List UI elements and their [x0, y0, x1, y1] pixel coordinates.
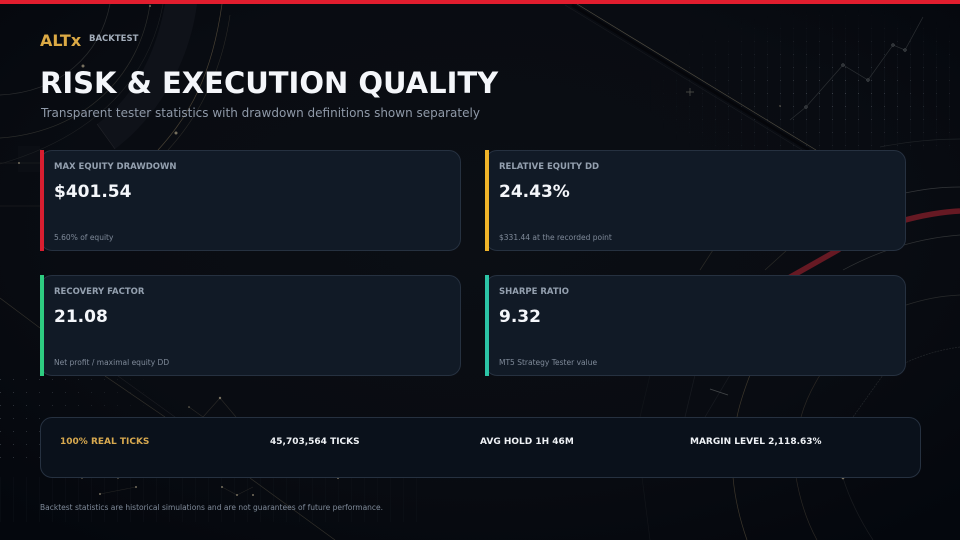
subtitle: Transparent tester statistics with drawdown definitions shown separately — [41, 106, 480, 120]
stat: margin level: MARGIN LEVEL 2,118.63% — [690, 437, 822, 447]
panel: recovery factor — [40, 275, 461, 376]
note: MT5 Strategy Tester value — [499, 358, 597, 366]
note: Net profit / maximal equity DD — [54, 358, 169, 366]
label: SHARPE RATIO — [499, 287, 569, 297]
value: 24.43% — [499, 182, 570, 202]
footer disclaimer: Backtest statistics are historical simulations and are not guarantees of future performance. — [40, 503, 383, 512]
note: $331.44 at the recorded point — [499, 232, 612, 242]
label: RELATIVE EQUITY DD — [499, 162, 599, 172]
stat: ticks: 45,703,564 TICKS — [270, 437, 360, 447]
label: RECOVERY FACTOR — [54, 287, 144, 297]
panel: execution stats strip — [40, 417, 920, 478]
brand logo: ALTx — [40, 30, 81, 50]
label: MAX EQUITY DRAWDOWN — [54, 162, 177, 172]
value: 9.32 — [499, 307, 541, 327]
value: 21.08 — [54, 307, 108, 327]
value: $401.54 — [54, 182, 131, 202]
stat: real ticks: 100% REAL TICKS — [60, 437, 149, 447]
panel: relative equity dd — [485, 150, 906, 251]
note: 5.60% of equity — [54, 232, 113, 242]
top accent bar — [0, 0, 960, 4]
stat: avg hold: AVG HOLD 1H 46M — [480, 437, 574, 447]
title: RISK & EXECUTION QUALITY — [40, 66, 498, 100]
brand tag: BACKTEST — [89, 34, 138, 44]
panel: sharpe ratio — [485, 275, 906, 376]
panel: max equity drawdown — [40, 150, 461, 251]
